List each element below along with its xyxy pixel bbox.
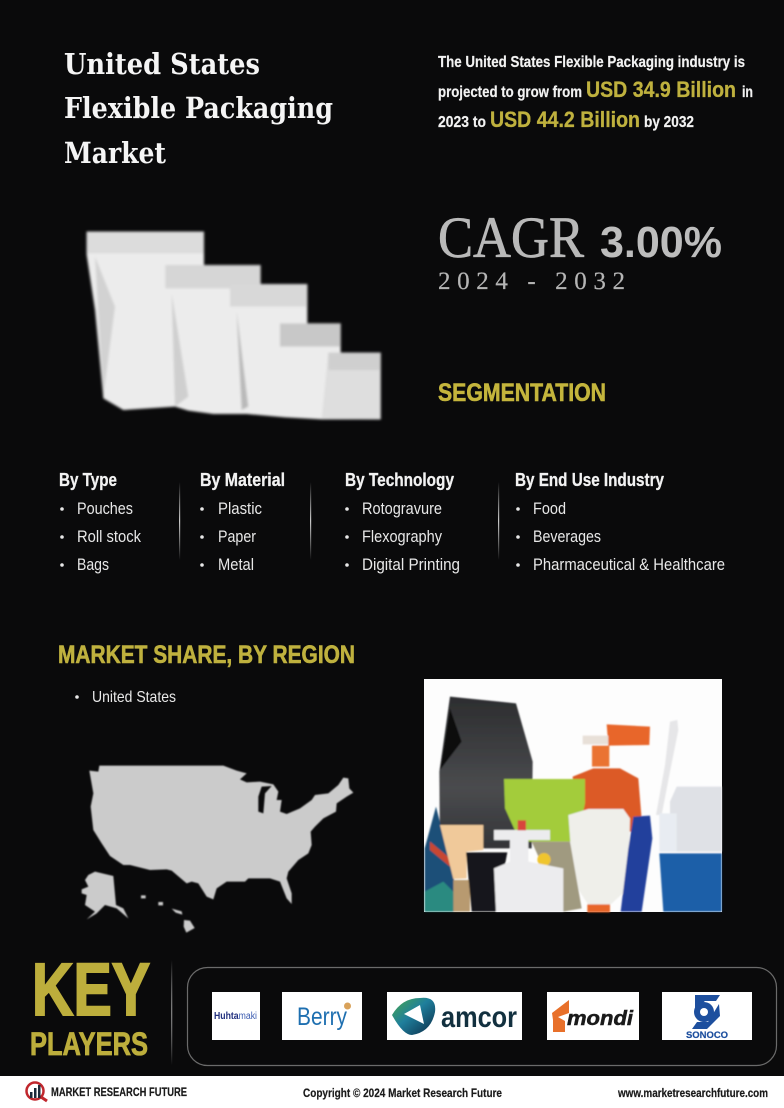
copyright: Copyright © 2024 Market Research Future bbox=[303, 1086, 502, 1100]
segment: by technology: Flexography bbox=[362, 528, 443, 546]
segment: by type: By Type bbox=[59, 469, 117, 490]
title: Market bbox=[64, 136, 167, 170]
segment: by technology: Rotogravure bbox=[362, 500, 442, 518]
CAGR bbox=[438, 205, 722, 295]
segment: by technology bbox=[345, 469, 460, 574]
green pouch bbox=[504, 779, 585, 842]
logo: Market Research Future: MARKET RESEARCH FUTURE bbox=[51, 1085, 187, 1099]
segment: by type bbox=[59, 469, 142, 574]
segment: by type: Roll stock bbox=[77, 528, 142, 546]
white front pouch bbox=[494, 830, 563, 912]
heading: key players: PLAYERS bbox=[30, 1026, 148, 1062]
heading: key players: KEY bbox=[32, 948, 150, 1031]
small black pouch bbox=[466, 852, 507, 912]
logo: Berry bbox=[282, 992, 362, 1040]
orange pouch bbox=[607, 724, 650, 746]
logo: Berry: Berry bbox=[297, 1003, 347, 1031]
segment: by technology: By Technology bbox=[345, 469, 455, 490]
text block: market forecast: USD 34.9 Billion bbox=[586, 77, 736, 102]
CAGR: 2024 - 2032 bbox=[438, 268, 625, 295]
CAGR: CAGR bbox=[438, 205, 584, 270]
logo: Mondi: mondi bbox=[567, 1008, 633, 1030]
panel: key player logos bbox=[188, 968, 776, 1066]
segment: by material bbox=[200, 469, 285, 574]
blue spout bbox=[621, 816, 652, 912]
segment: by end use industry: Beverages bbox=[533, 528, 601, 546]
segment: by end use industry: Food bbox=[533, 500, 566, 518]
text block: market forecast: by 2032 bbox=[644, 114, 694, 131]
segment: by material: Metal bbox=[218, 556, 254, 574]
image: assorted flexible packaging bbox=[424, 679, 722, 912]
segment: by technology: Digital Printing bbox=[362, 556, 460, 574]
map: United States bbox=[82, 766, 353, 933]
text block: market forecast: 2023 to bbox=[438, 114, 486, 131]
logo: Huhtamaki bbox=[212, 992, 260, 1040]
segment: by end use industry bbox=[515, 469, 725, 574]
segment: by material: Plastic bbox=[218, 500, 262, 518]
title: Flexible Packaging bbox=[64, 91, 333, 125]
logo: Mondi bbox=[547, 992, 639, 1040]
segment: by type: Bags bbox=[77, 556, 109, 574]
heading: segmentation: SEGMENTATION bbox=[438, 379, 606, 407]
title bbox=[64, 47, 333, 170]
heading: market share by region: MARKET SHARE, BY REGION bbox=[58, 641, 355, 669]
logo: Sonoco bbox=[662, 992, 752, 1041]
clear window pack bbox=[532, 842, 582, 912]
heading: key players bbox=[30, 948, 150, 1062]
segment: by material: Paper bbox=[218, 528, 256, 546]
logo: Amcor bbox=[387, 992, 522, 1040]
footer bbox=[0, 1076, 784, 1108]
segment: by end use industry: By End Use Industry bbox=[515, 469, 665, 490]
segment: by type: Pouches bbox=[77, 500, 133, 518]
text block: market forecast: USD 44.2 Billion bbox=[490, 107, 640, 132]
kraft pouch bbox=[440, 825, 483, 879]
white spout pouch bbox=[568, 809, 630, 905]
logo: Sonoco: SONOCO bbox=[686, 1030, 728, 1041]
title: United States bbox=[64, 47, 260, 81]
text block: market forecast: projected to grow from bbox=[438, 84, 582, 101]
logo: Market Research Future bbox=[26, 1082, 187, 1101]
logo: Amcor: amcor bbox=[441, 1001, 517, 1034]
CAGR: 3.00% bbox=[600, 218, 722, 267]
black bag bbox=[439, 697, 533, 848]
white straw bbox=[656, 720, 678, 815]
patterned pouch bbox=[425, 807, 454, 912]
text block: market forecast: in bbox=[742, 84, 753, 101]
segment: by end use industry: Pharmaceutical & Healthcare bbox=[533, 556, 725, 574]
image: white stand-up pouches bbox=[87, 232, 381, 419]
jerry can bbox=[670, 787, 722, 852]
segment: by material: By Material bbox=[200, 469, 285, 490]
text block: market forecast bbox=[438, 54, 753, 132]
region list item: United States bbox=[92, 689, 176, 706]
logo: Huhtamaki: Huhtamaki bbox=[214, 1011, 257, 1022]
